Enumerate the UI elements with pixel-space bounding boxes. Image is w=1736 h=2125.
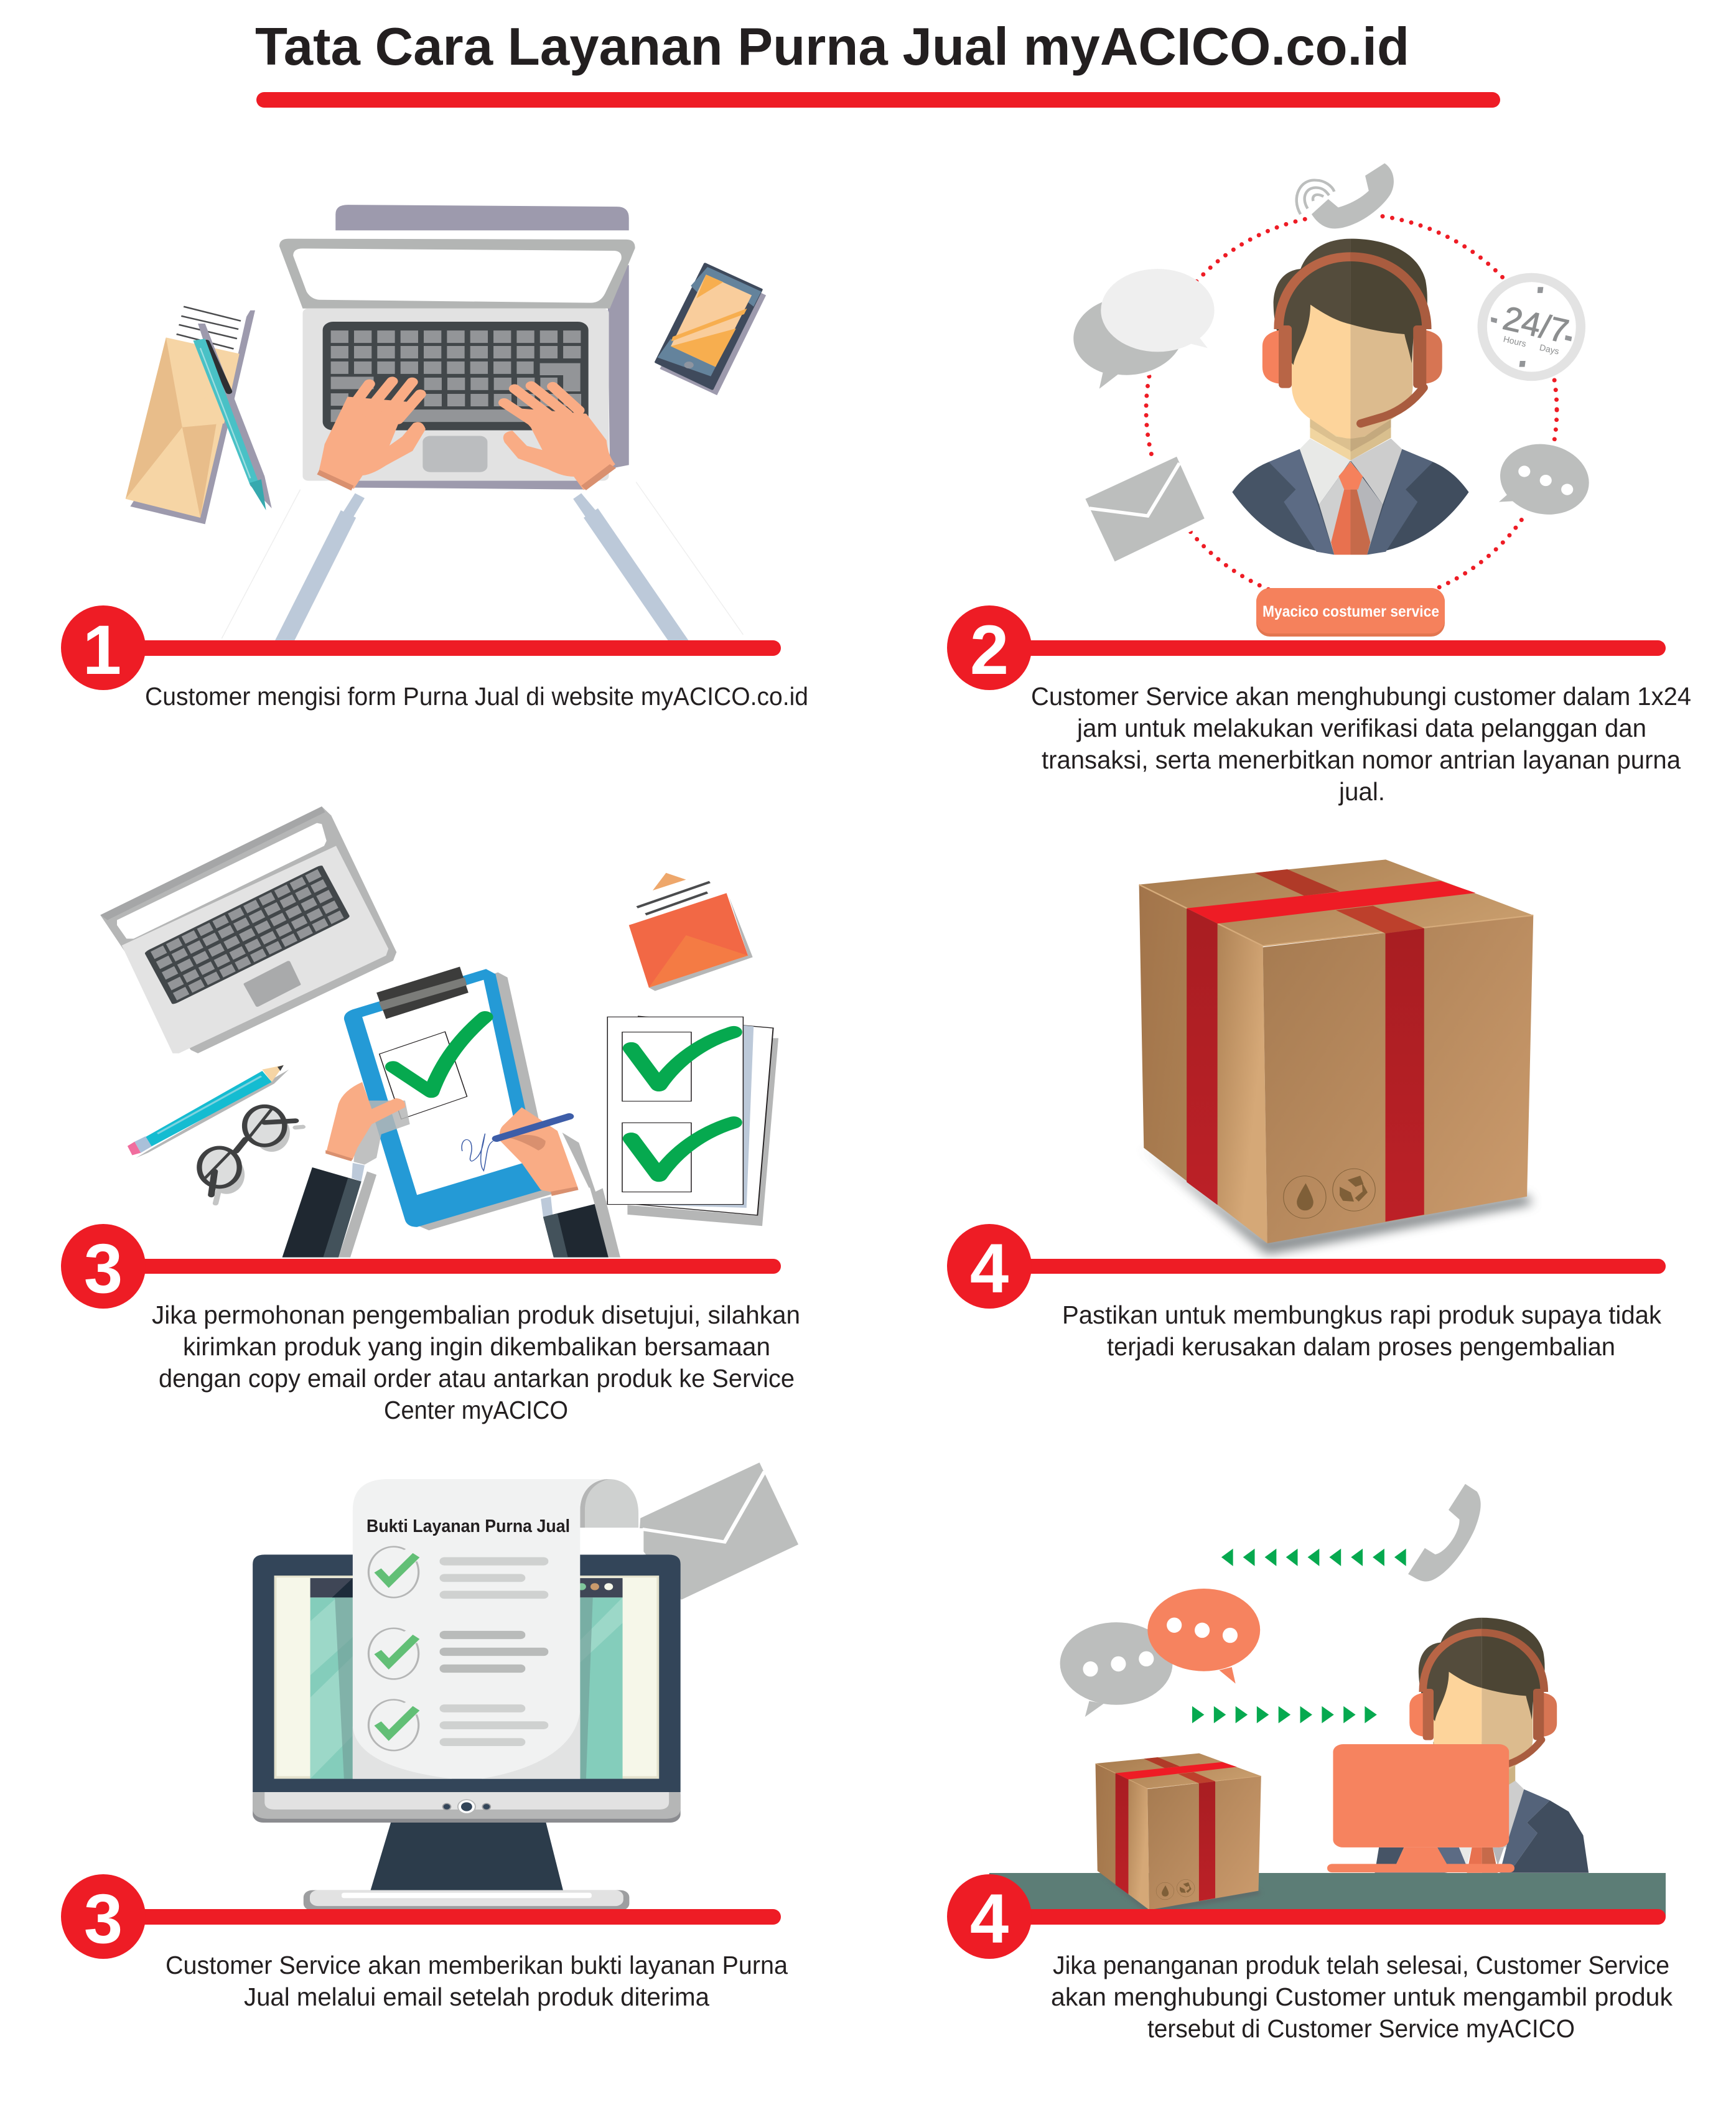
step 1 description: Customer mengisi form Purna Jual di website myACICO.co.id bbox=[145, 682, 808, 711]
step 3 description bbox=[152, 1301, 800, 1424]
icon: orange chat bubble bbox=[1147, 1589, 1260, 1684]
title underline bbox=[256, 92, 1500, 108]
step 6 description: akan menghubungi Customer untuk mengambil produk bbox=[1051, 1983, 1673, 2011]
agent head bbox=[1409, 1618, 1557, 1782]
step 4 description: terjadi kerusakan dalam proses pengembalian bbox=[1107, 1332, 1615, 1361]
step 2 description bbox=[1031, 682, 1691, 806]
icon: headset agent bbox=[1232, 414, 1469, 554]
panel: step 5 proof of service bbox=[61, 1462, 798, 2011]
arrows: towards customer bbox=[1221, 1549, 1406, 1566]
icon: pencil bbox=[128, 1065, 289, 1158]
step number 2 badge: 2 bbox=[970, 611, 1009, 689]
icon: small parcel bbox=[1096, 1754, 1261, 1915]
arrows: towards agent bbox=[1192, 1706, 1377, 1723]
step 6 description: tersebut di Customer Service myACICO bbox=[1147, 2014, 1575, 2043]
24/7 label: 24/7 bbox=[1500, 299, 1572, 350]
agent head with headset bbox=[1262, 239, 1442, 439]
icon: chat bubbles bbox=[1073, 269, 1215, 389]
step number 3 badge bbox=[61, 1224, 781, 1309]
step 2 description: jam untuk melakukan verifikasi data pelanggan dan bbox=[1076, 714, 1646, 742]
icon: right hand bbox=[504, 386, 616, 490]
icon: left hand bbox=[317, 381, 425, 490]
icon: glasses bbox=[199, 1106, 302, 1203]
desk surface bbox=[989, 1873, 1666, 1917]
icon: clock face bbox=[1482, 278, 1580, 376]
step 4 description: Pastikan untuk membungkus rapi produk supaya tidak bbox=[1062, 1301, 1661, 1329]
step 6 description: Jika penanganan produk telah selesai, Customer Service bbox=[1053, 1951, 1669, 1979]
icon: gray chat bubble bbox=[1060, 1622, 1172, 1717]
step number 3 badge (second) bbox=[61, 1874, 781, 1959]
icon: chat bubble with dots bbox=[1492, 436, 1597, 523]
icon: checklist papers bbox=[607, 1016, 778, 1226]
step 3 description: Center myACICO bbox=[384, 1396, 568, 1424]
icon: envelope bbox=[1085, 457, 1205, 561]
icon: phone with signal bbox=[1297, 163, 1394, 228]
step number 4 badge: 4 bbox=[970, 1230, 1009, 1307]
step number 1 badge: 1 bbox=[83, 611, 121, 689]
icon: signing hands and sleeves bbox=[282, 1082, 620, 1258]
panel: step 4 packaging bbox=[947, 859, 1666, 1361]
title: Tata Cara Layanan Purna Jual myACICO.co.id bbox=[255, 17, 1409, 77]
illustration: monitor with receipt bbox=[253, 1462, 798, 1910]
step number 2 badge bbox=[947, 605, 1666, 690]
agent name tag bbox=[1256, 588, 1445, 637]
step 5 description: Customer Service akan memberikan bukti layanan Purna bbox=[166, 1951, 788, 1979]
icon: smartphone bbox=[656, 264, 766, 395]
step 2 description: transaksi, serta menerbitkan nomor antrian layanan purna bbox=[1042, 745, 1681, 774]
icon: laptop bbox=[100, 806, 396, 1053]
icon: orange monitor bbox=[1327, 1744, 1514, 1872]
step number 3 badge (second): 3 bbox=[84, 1880, 123, 1958]
step 3 description: dengan copy email order atau antarkan produk ke Service bbox=[159, 1364, 795, 1393]
step 3 description: Jika permohonan pengembalian produk disetujui, silahkan bbox=[152, 1301, 800, 1329]
24/7 label: Hours bbox=[1503, 334, 1528, 348]
illustration: desk with clipboard bbox=[100, 806, 778, 1258]
agent suit bbox=[1374, 1742, 1589, 1873]
step 2 description: jual. bbox=[1338, 777, 1385, 806]
step 6 description bbox=[1051, 1951, 1673, 2043]
step 4 description bbox=[1062, 1301, 1661, 1361]
icon: phone bbox=[1408, 1484, 1481, 1582]
step 5 description bbox=[166, 1951, 788, 2011]
step 3 description: kirimkan produk yang ingin dikembalikan bersamaan bbox=[183, 1332, 770, 1361]
illustration: orange monitor and parcel bbox=[1096, 1744, 1514, 1915]
illustration: laptop with typing hands bbox=[126, 205, 766, 640]
illustration: agent and small parcel bbox=[1060, 1484, 1589, 1873]
agent name tag: Myacico costumer service bbox=[1262, 603, 1439, 620]
icon: envelope bbox=[638, 1462, 798, 1600]
icon: monitor bbox=[253, 1554, 681, 1910]
icon: receipt paper bbox=[353, 1479, 643, 1779]
step number 1 badge bbox=[61, 605, 781, 690]
icon: blue clipboard bbox=[344, 966, 555, 1230]
step 2 description: Customer Service akan menghubungi customer dalam 1x24 bbox=[1031, 682, 1691, 711]
receipt heading: Bukti Layanan Purna Jual bbox=[366, 1516, 570, 1536]
panel: step 1 bbox=[61, 205, 808, 711]
icon: orange envelope bbox=[629, 873, 753, 991]
step number 4 badge (second) bbox=[947, 1874, 1666, 1959]
dotted ring bbox=[1146, 214, 1557, 606]
step number 4 badge bbox=[947, 1224, 1666, 1309]
icon: sleeves bbox=[275, 493, 688, 640]
step 5 description: Jual melalui email setelah produk diterima bbox=[244, 1983, 709, 2011]
panel: step 6 pick up bbox=[947, 1484, 1673, 2043]
icons: phone, chat, clock, envelope bbox=[1073, 163, 1597, 561]
illustration: cardboard box bbox=[1139, 859, 1533, 1255]
24/7 label: Days bbox=[1539, 342, 1560, 357]
step number 4 badge (second): 4 bbox=[970, 1880, 1009, 1958]
panel: step 2 bbox=[947, 163, 1691, 806]
step number 3 badge: 3 bbox=[84, 1230, 123, 1307]
panel: step 3 form signing bbox=[61, 806, 800, 1424]
icon: envelope, note and pen bbox=[126, 289, 272, 524]
checklist rows bbox=[368, 1547, 548, 1750]
